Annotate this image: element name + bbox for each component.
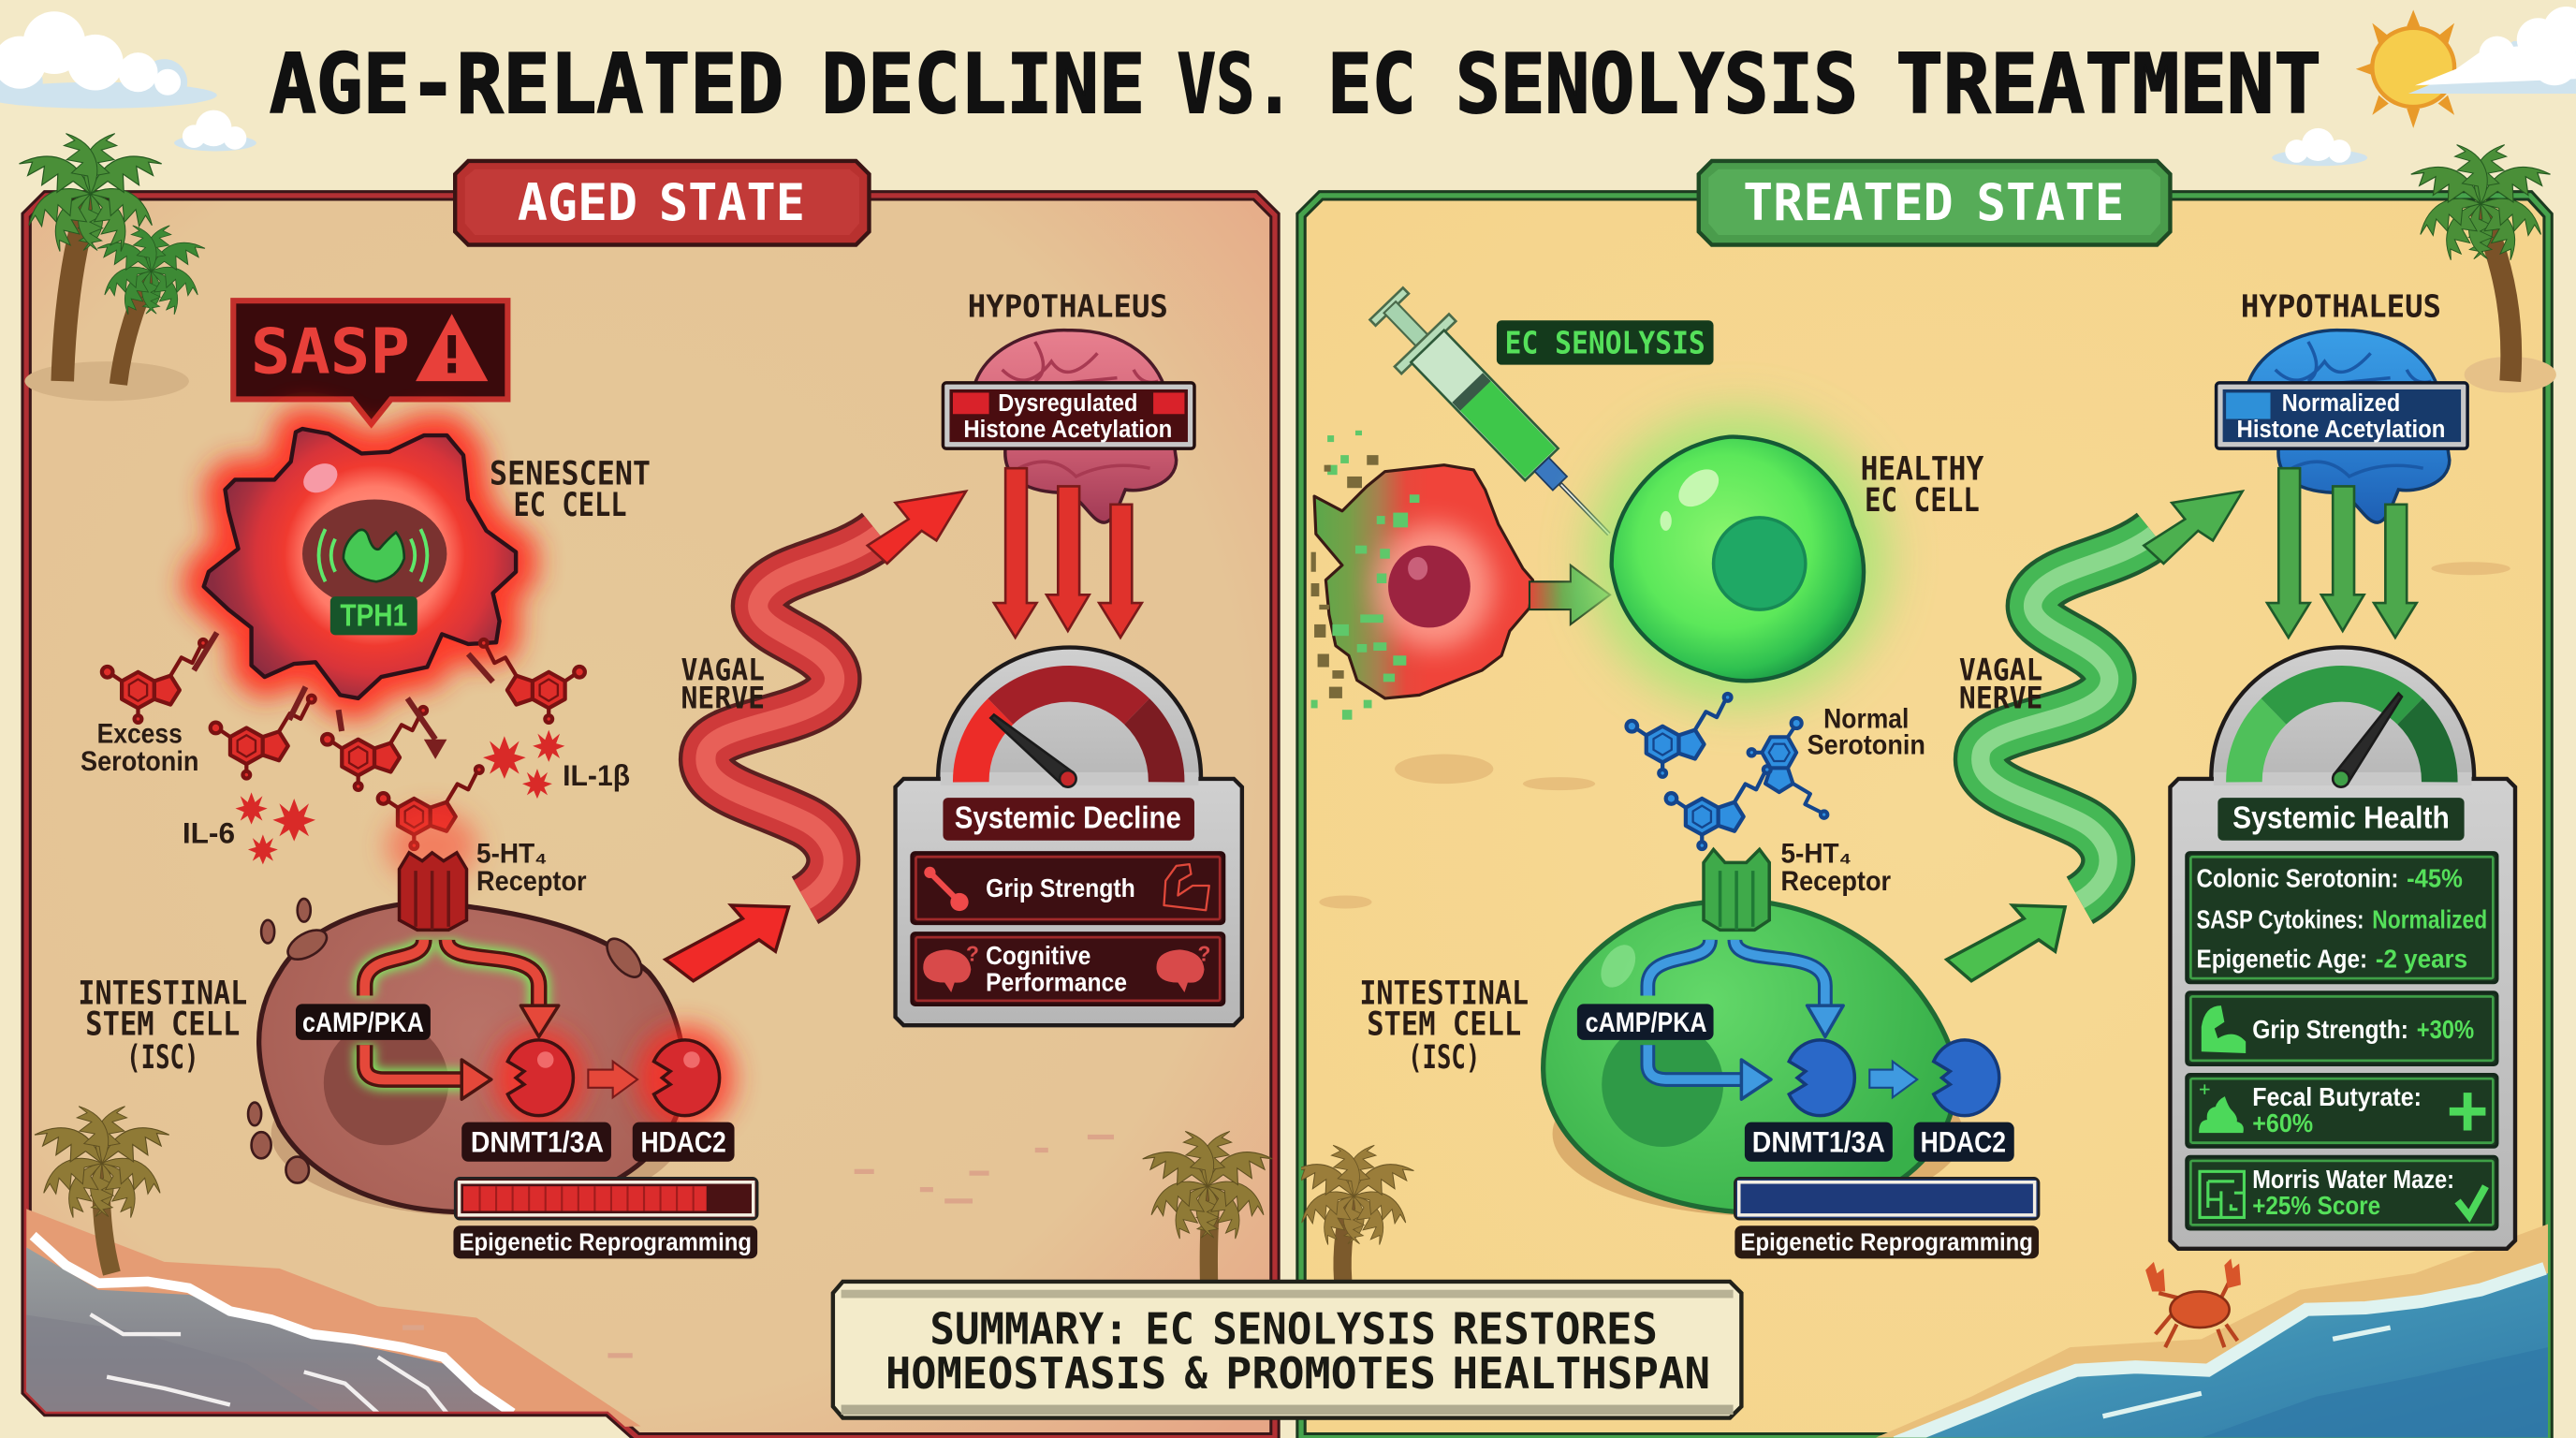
- arrow: DNMT to HDAC aged: [588, 1062, 637, 1097]
- label: vagal nerve treated: NERVE: [1959, 682, 2042, 715]
- sand patches: [1319, 562, 2510, 909]
- label: normalized histone acetylation: Normalized: [2282, 389, 2400, 417]
- label: excess serotonin: Excess: [97, 718, 183, 749]
- metrics box: serotonin, cytokines, epigenetic age: Epigenetic Age:: [2197, 945, 2367, 974]
- nucleus: [1714, 518, 1806, 609]
- metric: cognitive performance decline: Performance: [986, 967, 1127, 996]
- summary box: PROMOTES: [1225, 1348, 1436, 1399]
- label: IL-6: IL-6: [183, 815, 235, 849]
- label: hypothalamus treated: HYPOTHALEUS: [2241, 288, 2441, 325]
- enzyme TPH1: [319, 529, 427, 581]
- label: intestinal stem cell treated: (ISC): [1408, 1038, 1480, 1077]
- beach with water: [23, 1208, 641, 1438]
- badge: treated state: STATE: [1976, 173, 2124, 232]
- cloud: small left: [174, 110, 256, 151]
- icon: brain aged: [973, 330, 1177, 522]
- label: vagal nerve aged: VAGAL: [681, 654, 765, 688]
- summary box: EC: [1145, 1304, 1194, 1355]
- label: systemic health: Systemic Health: [2232, 801, 2450, 836]
- label: vagal nerve aged: [681, 654, 765, 715]
- signalling arrows: aged: [365, 940, 559, 1099]
- metric: fecal butyrate: Fecal Butyrate:: [2252, 1082, 2422, 1111]
- metric: fecal butyrate: +60%: [2252, 1108, 2313, 1137]
- label: intestinal stem cell treated: STEM CELL: [1367, 1005, 1521, 1044]
- label: 5-HT4 receptor aged: Receptor: [476, 866, 587, 897]
- metric: grip strength: [2187, 992, 2497, 1064]
- label: cAMP/PKA aged: cAMP/PKA: [302, 1007, 424, 1038]
- normal serotonin molecules: [1627, 694, 1827, 849]
- summary box: [833, 1282, 1741, 1418]
- palm: treated bottom left: [1301, 1144, 1414, 1280]
- icon: brain question left: ?: [966, 942, 979, 966]
- label: intestinal stem cell treated: INTESTINAL: [1359, 974, 1529, 1012]
- icon: flexed arm: [2202, 1005, 2246, 1053]
- summary box: SUMMARY:: [929, 1304, 1129, 1355]
- cell body: [1314, 465, 1532, 698]
- gauge needle: [990, 714, 1076, 787]
- intestinal stem cell: aged: [248, 899, 684, 1216]
- title: AGE-RELATED: [270, 37, 783, 132]
- icon: syringe: [1359, 277, 1636, 561]
- intestinal stem cell: treated: [1544, 901, 1963, 1216]
- icon: brain treated: [2246, 330, 2450, 522]
- frame colour line: [26, 196, 1275, 1438]
- arrows: brain to gauge treated: [2267, 468, 2417, 638]
- palm: bottom left: [31, 1100, 173, 1273]
- label: IL-1 beta: IL-1β: [563, 758, 630, 792]
- summary box: SENOLYSIS: [1212, 1304, 1436, 1355]
- arrow: DNMT to HDAC treated: [1869, 1062, 1917, 1097]
- label: intestinal stem cell treated: [1359, 974, 1529, 1077]
- enzyme: DNMT aged: [507, 1040, 573, 1116]
- summary box: RESTORES: [1453, 1304, 1658, 1355]
- badge: treated state: TREATED: [1743, 173, 1954, 232]
- label: dysregulated histone acetylation: Histone Acetylation: [963, 415, 1172, 443]
- label: HDAC2 aged: HDAC2: [641, 1124, 726, 1158]
- label: 5-HT4 receptor treated: Receptor: [1781, 866, 1891, 897]
- label: excess serotonin: Serotonin: [80, 746, 198, 777]
- label: normal serotonin: Normal: [1823, 703, 1909, 734]
- label: normal serotonin: Serotonin: [1808, 730, 1925, 761]
- frame colour line: [1301, 196, 2548, 1438]
- cytokines IL-1 beta: [483, 730, 564, 799]
- title: EC: [1327, 37, 1416, 132]
- metric: Morris water maze: Morris Water Maze:: [2252, 1165, 2454, 1194]
- callout: SASP warning: SASP: [251, 315, 410, 388]
- cell highlight: [1661, 462, 1726, 531]
- dissolving pixels: [1311, 431, 1419, 720]
- icon: crab: [2145, 1258, 2241, 1347]
- label: epigenetic reprogramming treated: Epigenetic Reprogramming: [1741, 1228, 2033, 1256]
- icon: check mark: [2458, 1186, 2485, 1216]
- gauge dome: [938, 648, 1201, 788]
- title: DECLINE: [822, 37, 1145, 132]
- label: normal serotonin: [1808, 703, 1925, 761]
- gauge panel: systemic decline: [896, 648, 1242, 1025]
- label: intestinal stem cell aged: [78, 974, 247, 1077]
- metrics box: serotonin, cytokines, epigenetic age: -2 years: [2376, 945, 2467, 974]
- summary box: HEALTHSPAN: [1453, 1348, 1710, 1399]
- progress bar: epigenetic reprogramming treated: [1734, 1178, 2039, 1219]
- palm: bottom right of panel: [1139, 1125, 1276, 1290]
- callout: SASP warning: [233, 301, 507, 424]
- nucleus: [1602, 1022, 1723, 1147]
- metrics box: serotonin, cytokines, epigenetic age: -45%: [2407, 864, 2463, 893]
- panel: aged state: [23, 196, 1276, 1438]
- icon: broken wrench: [924, 867, 969, 911]
- label: hypothalamus aged: HYPOTHALEUS: [968, 288, 1168, 325]
- arrows: brain to gauge aged: [994, 468, 1142, 638]
- arrow: senescent to healthy: [1530, 565, 1610, 624]
- icon: brain question left: [923, 942, 979, 992]
- label: dysregulated histone acetylation: [943, 383, 1194, 448]
- cell glow: [204, 429, 516, 698]
- label: senescent EC cell: [490, 455, 651, 524]
- badge: aged state: STATE: [659, 173, 805, 232]
- cell body: [259, 902, 684, 1212]
- cell shadow: [271, 1051, 681, 1216]
- title: TREATMENT: [1895, 37, 2321, 132]
- dome seam cover: [941, 772, 1198, 785]
- label: DNMT treated: DNMT1/3A: [1752, 1124, 1885, 1158]
- label: healthy EC cell: HEALTHY: [1861, 449, 1983, 488]
- label: HDAC2 treated: HDAC2: [1921, 1124, 2006, 1158]
- membrane debris: [248, 899, 648, 1183]
- signalling arrows: treated: [1647, 940, 1843, 1099]
- icon: maze: [2200, 1171, 2244, 1217]
- icon: plus: [2450, 1093, 2485, 1130]
- badge: aged state: [455, 161, 869, 244]
- metrics box: serotonin, cytokines, epigenetic age: Normalized: [2372, 905, 2487, 934]
- cell highlight: [1594, 939, 1643, 993]
- icon: weak arm: [1164, 864, 1209, 910]
- metric: grip strength decline: Grip Strength: [986, 873, 1135, 902]
- secreted serotonin molecules: [102, 639, 585, 849]
- receptor 5-HT4: treated: [1704, 849, 1769, 930]
- healthy EC cell: [1587, 411, 1889, 707]
- label: intestinal stem cell aged: STEM CELL: [85, 1005, 240, 1044]
- vagal nerve: treated: [1981, 534, 2154, 901]
- metrics box: serotonin, cytokines, epigenetic age: [2187, 853, 2497, 983]
- cell body: [204, 429, 516, 698]
- gauge needle: [2333, 694, 2402, 787]
- badge: treated state: [1699, 161, 2170, 244]
- cell highlight: [299, 458, 343, 499]
- label: cAMP/PKA treated: cAMP/PKA: [1586, 1007, 1707, 1038]
- glow behind enzymes: [493, 1025, 735, 1130]
- label: normalized histone acetylation: [2217, 383, 2467, 448]
- enzyme: DNMT treated: [1789, 1040, 1854, 1116]
- cell shadow: [1553, 1051, 1963, 1216]
- label: senescent EC cell: EC CELL: [514, 486, 627, 524]
- metric: Morris water maze: [2187, 1157, 2497, 1229]
- label: systemic decline: Systemic Decline: [955, 801, 1181, 836]
- vagal nerve: aged: [706, 534, 879, 901]
- gauge dome: [2211, 647, 2474, 788]
- panel frame: [1301, 196, 2548, 1438]
- metric: cognitive performance decline: Cognitive: [986, 941, 1090, 970]
- gauge arc: [2244, 683, 2439, 782]
- label: 5-HT4 receptor aged: 5-HT₄: [476, 838, 547, 869]
- metric: fecal butyrate: [2187, 1075, 2497, 1147]
- cell body: [1544, 901, 1956, 1213]
- title: SENOLYSIS: [1456, 37, 1858, 132]
- nucleus: [1388, 546, 1471, 627]
- gauge arc: [971, 683, 1166, 782]
- label: DNMT aged: DNMT1/3A: [471, 1124, 604, 1158]
- metric: Morris water maze: +25% Score: [2252, 1191, 2380, 1220]
- label: intestinal stem cell aged: INTESTINAL: [78, 974, 247, 1012]
- label: vagal nerve treated: VAGAL: [1959, 654, 2042, 688]
- label: normalized histone acetylation: Histone Acetylation: [2237, 415, 2445, 443]
- enzyme: HDAC aged: [654, 1040, 720, 1116]
- icon: sun: [2356, 10, 2454, 128]
- progress bar: epigenetic reprogramming aged: [455, 1178, 757, 1219]
- metric: grip strength: +30%: [2417, 1015, 2474, 1044]
- nucleus: [324, 1020, 448, 1145]
- palm: top right: [2407, 139, 2556, 392]
- arrow: vagal nerve to brain treated: [2144, 492, 2243, 564]
- label: vagal nerve aged: NERVE: [681, 682, 765, 715]
- label: healthy EC cell: EC CELL: [1865, 481, 1980, 520]
- cloud: top left: [0, 11, 217, 109]
- title: VS.: [1178, 37, 1294, 132]
- icon: brain question right: [1156, 942, 1210, 992]
- label: 5-HT4 receptor aged: [476, 838, 587, 897]
- panel frame: [26, 196, 1275, 1438]
- summary box: HOMEOSTASIS: [886, 1348, 1166, 1399]
- summary box: &: [1184, 1348, 1208, 1399]
- label: senescent EC cell: SENESCENT: [490, 455, 651, 493]
- icon: brain question right: ?: [1198, 942, 1210, 966]
- cytokines IL-6: [235, 792, 315, 864]
- label: excess serotonin: [80, 718, 198, 777]
- gauge panel body: [896, 779, 1242, 1025]
- cloud: small right: [2272, 128, 2367, 166]
- metrics box: serotonin, cytokines, epigenetic age: Colonic Serotonin:: [2197, 864, 2398, 893]
- metrics box: serotonin, cytokines, epigenetic age: SASP Cytokines:: [2197, 905, 2364, 934]
- arrow: stem cell to vagal nerve aged: [666, 905, 788, 981]
- label: EC senolysis: EC SENOLYSIS: [1505, 324, 1705, 360]
- label: healthy EC cell: [1861, 449, 1983, 520]
- palm group: top left: [15, 127, 208, 401]
- label: vagal nerve treated: [1959, 654, 2042, 715]
- arrow: vagal nerve to brain aged: [868, 492, 966, 564]
- title: [270, 37, 2321, 132]
- label: epigenetic reprogramming aged: Epigenetic Reprogramming: [460, 1228, 752, 1256]
- beach with water: [1856, 1224, 2548, 1438]
- dome seam cover: [2214, 772, 2471, 785]
- metric: grip strength decline: [912, 853, 1224, 923]
- label: 5-HT4 receptor treated: [1781, 838, 1891, 897]
- secretion arrows: [194, 633, 493, 759]
- icon: warning triangle: [416, 314, 488, 381]
- badge: aged state: AGED: [518, 173, 637, 232]
- gauge panel: systemic health: [2170, 647, 2515, 1249]
- label: 5-HT4 receptor treated: 5-HT₄: [1781, 838, 1852, 869]
- metric: grip strength: Grip Strength:: [2252, 1015, 2408, 1044]
- senescent EC cell: [204, 429, 516, 698]
- metric: cognitive performance decline: [912, 933, 1224, 1005]
- enzyme: HDAC treated: [1934, 1040, 1999, 1116]
- label: dysregulated histone acetylation: Dysregulated: [998, 389, 1137, 417]
- cell inner glow: [1375, 524, 1493, 649]
- sand specks: [402, 1137, 1114, 1356]
- arrow: stem cell to vagal nerve treated: [1947, 905, 2065, 981]
- cloud: right of sun: [2408, 7, 2576, 94]
- cell glow: [1587, 411, 1889, 707]
- icon: stool with plus: [2200, 1084, 2243, 1132]
- gauge panel body: [2170, 779, 2515, 1249]
- label TPH1: TPH1: [340, 599, 407, 634]
- dissolving senescent cell: [1311, 431, 1532, 720]
- receptor 5-HT4: aged: [386, 810, 478, 930]
- panel: treated state: [1290, 196, 2548, 1438]
- cell body: [1612, 436, 1864, 681]
- nucleus: [302, 500, 446, 608]
- label: intestinal stem cell aged: (ISC): [126, 1038, 198, 1077]
